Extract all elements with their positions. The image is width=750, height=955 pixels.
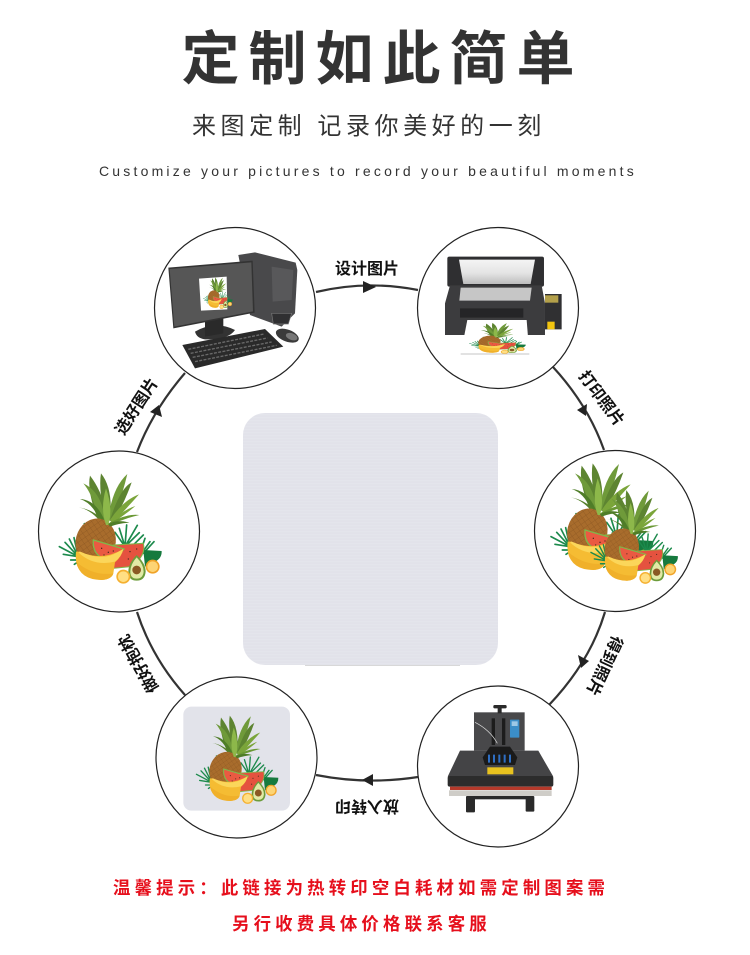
label: design: 设计图片 [335,260,399,278]
notice line one: 温馨提示：此链接为热转印空白耗材如需定制图案需 [113,878,609,898]
step labels [112,260,628,815]
label: choose: 选好图片 [112,375,162,438]
notice line two: 另行收费具体价格联系客服 [232,914,491,934]
arrow: upper right segment [553,367,604,450]
heat press illustration [448,705,553,812]
arrow: upper left segment [137,373,185,452]
label: transfer: 放入转印 [335,797,399,815]
step circle: heat press [418,686,578,847]
step circle: mirrored double fruit image [534,450,696,612]
step circle: source fruit image [38,451,200,612]
label: finished: 做好抱枕 [114,631,163,696]
subtitle: 来图定制 记录你美好的一刻 [192,113,546,140]
step circle: computer [154,228,316,388]
arrow: top segment [316,281,418,293]
label: print: 打印照片 [575,367,628,430]
line: lower left segment [137,612,185,695]
step circle: printer [418,228,578,388]
pineapple fruit artwork [59,473,162,584]
arrow: bottom segment [316,774,418,786]
step circle: finished coaster [156,677,317,838]
english subtitle: Customize your pictures to record your beautiful moments [99,163,637,179]
central blank coaster [243,413,498,665]
label: get photo: 得到照片 [582,633,626,698]
arrow: lower right segment [549,612,605,705]
title: 定制如此简单 [182,27,584,92]
notice text [113,878,609,934]
two pineapple fruit artworks [551,463,678,584]
connecting ring with arrows [137,281,605,786]
printed coaster with fruit [183,707,290,811]
printer illustration [445,257,562,354]
computer illustration [168,252,301,368]
